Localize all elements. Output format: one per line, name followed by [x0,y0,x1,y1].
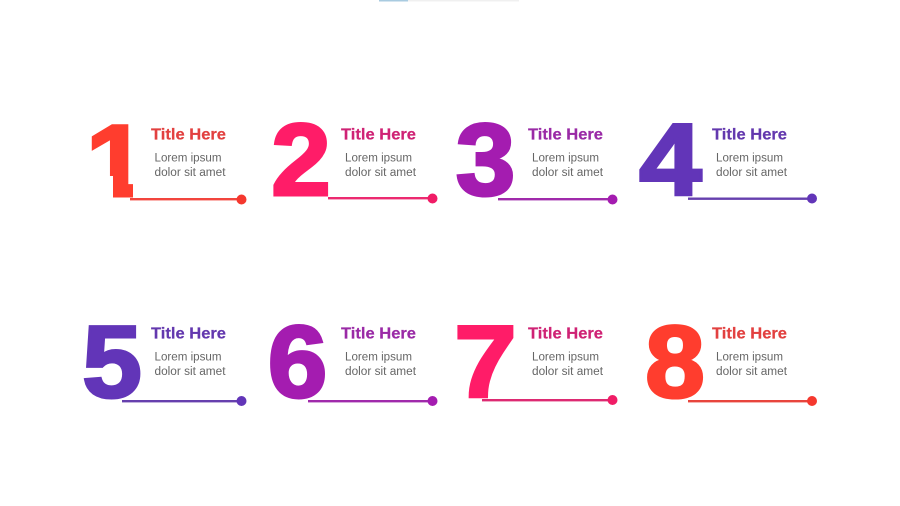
connector line and dot 6 [308,396,438,406]
description 4: Lorem ipsum [716,152,783,164]
description 2 [345,152,417,179]
item 8 [645,305,817,419]
description 6: dolor sit amet [345,366,417,378]
title 6: Title Here [341,326,416,342]
description 5: Lorem ipsum [154,352,222,364]
connector line and dot 4 [688,194,817,204]
description 3: Lorem ipsum [532,152,599,164]
item 7 [454,305,618,419]
number 4: 4 [639,103,702,217]
item 6 [268,305,438,419]
description 2: dolor sit amet [345,167,417,179]
description 8: dolor sit amet [716,366,788,378]
description 7 [532,352,604,378]
connector line and dot 1 [130,194,246,204]
number 1: 1 [86,105,147,218]
number 8: 8 [645,305,705,419]
connector line and dot 2 [328,194,438,204]
connector line and dot 8 [688,396,817,406]
item 2 [271,103,438,217]
connector line and dot 3 [498,194,618,204]
title 8: Title Here [712,326,787,342]
item 4 [639,103,817,217]
number 6: 6 [268,305,327,419]
number 3: 3 [456,103,515,217]
number 5: 5 [82,305,142,419]
description 3 [532,152,604,179]
title 1: Title Here [151,126,226,144]
number 2: 2 [271,103,331,217]
item 1 [92,124,246,204]
title 4: Title Here [712,126,787,144]
description 8 [716,352,788,378]
number 7: 7 [454,305,517,419]
description 1 [154,152,226,179]
description 1: dolor sit amet [154,167,226,179]
description 7: Lorem ipsum [532,352,599,364]
title 5: Title Here [151,326,226,342]
description 4 [716,152,788,179]
description 5: dolor sit amet [154,366,226,378]
description 6 [345,352,417,378]
description 6: Lorem ipsum [345,352,412,364]
item 3 [456,103,618,217]
description 1: Lorem ipsum [154,152,222,164]
item 5 [82,305,247,419]
description 3: dolor sit amet [532,167,604,179]
description 7: dolor sit amet [532,366,604,378]
connector line and dot 5 [122,396,246,406]
description 4: dolor sit amet [716,167,788,179]
title 3: Title Here [528,126,603,144]
title 2: Title Here [341,126,416,144]
description 8: Lorem ipsum [716,352,783,364]
description 5 [154,352,226,378]
connector line and dot 7 [482,395,618,405]
description 2: Lorem ipsum [345,152,412,164]
title 7: Title Here [528,326,603,342]
